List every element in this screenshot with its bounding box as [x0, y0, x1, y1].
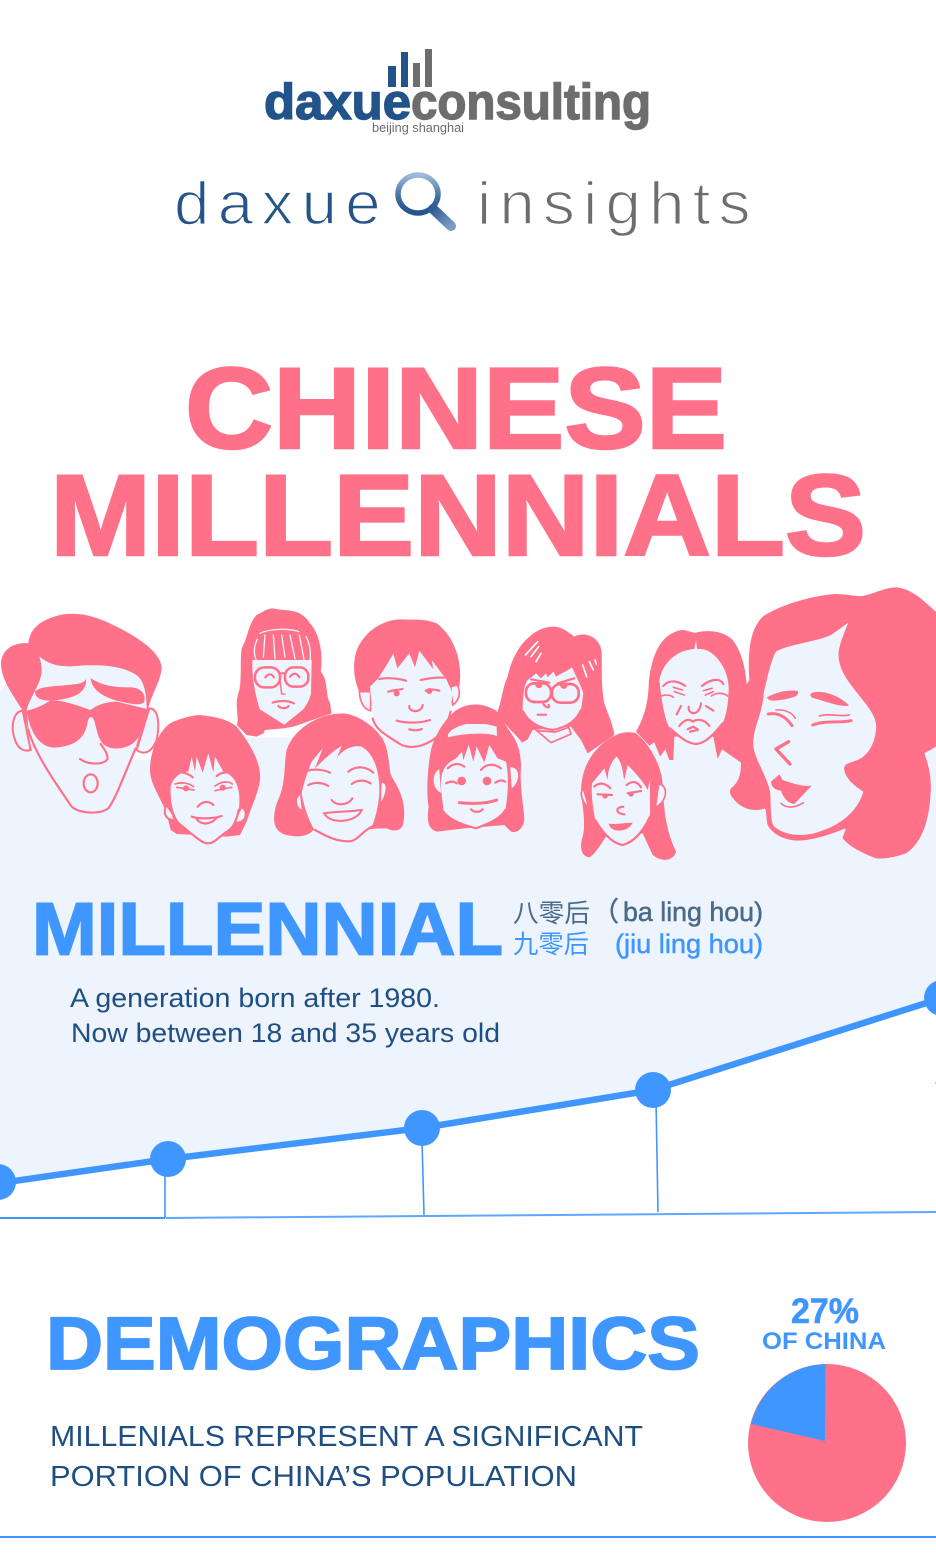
stat value: 27%: [791, 1292, 859, 1331]
term: ba ling hou Chinese: 八零后: [513, 900, 590, 928]
heading: DEMOGRAPHICS: DEMOGRAPHICS: [46, 1302, 700, 1385]
logo word: consulting: consulting: [411, 74, 651, 130]
term: ba ling hou pinyin: [592, 897, 763, 927]
title: [50, 345, 866, 580]
pinyin ba ling hou: ba ling hou): [623, 897, 763, 927]
term: jiu ling hou pinyin: (jiu ling hou): [615, 929, 763, 959]
statement line 2: PORTION OF CHINA’S POPULATION: [50, 1461, 577, 1493]
text block: Chinese terms: [513, 897, 763, 959]
face: wavy hair girl with glasses: [237, 608, 332, 737]
face: boy with short hair: [354, 619, 460, 747]
face: man with sunglasses: [1, 614, 162, 813]
title line: MILLENNIALS: MILLENNIALS: [50, 452, 866, 580]
text block: demographics statement: [50, 1421, 643, 1493]
face: long hair girl with round glasses: [498, 627, 614, 820]
face: small girl with long hair: [581, 732, 676, 860]
illustration: group of faces: [1, 587, 936, 860]
logo: daxue consulting: [264, 49, 651, 135]
logo: daxue insights: [174, 171, 750, 238]
logo word: daxue: daxue: [264, 74, 411, 130]
text block: definition: [70, 983, 500, 1048]
face: short hair woman: [150, 715, 260, 843]
stat label: OF CHINA: [762, 1328, 886, 1355]
heading: MILLENNIAL: MILLENNIAL: [32, 888, 503, 970]
term: jiu ling hou Chinese: 九零后: [513, 931, 589, 959]
icon: magnifying glass: [398, 175, 451, 226]
definition line 1: A generation born after 1980.: [70, 983, 440, 1013]
pie chart: share of population: [748, 1364, 906, 1522]
definition line 2: Now between 18 and 35 years old: [71, 1018, 500, 1048]
line chart: rising trend: [0, 980, 936, 1218]
face: girl with headband: [427, 704, 524, 832]
stat: 27% of China: [762, 1292, 886, 1355]
statement line 1: MILLENIALS REPRESENT A SIGNIFICANT: [50, 1421, 643, 1453]
pale blue background panel: [0, 674, 936, 1183]
face: smiling woman with bob: [274, 713, 404, 841]
opening fullwidth bracket: （: [592, 897, 619, 927]
logo word: insights: insights: [477, 171, 750, 238]
bottom divider: [0, 1536, 936, 1538]
logo tagline: beijing shanghai: [372, 120, 464, 135]
title line: CHINESE: CHINESE: [185, 345, 727, 473]
face: older woman with centre parting: [636, 630, 749, 760]
logo word: daxue: daxue: [174, 171, 381, 238]
icon: logo bars: [388, 49, 432, 87]
face: large laughing woman: [722, 587, 936, 859]
